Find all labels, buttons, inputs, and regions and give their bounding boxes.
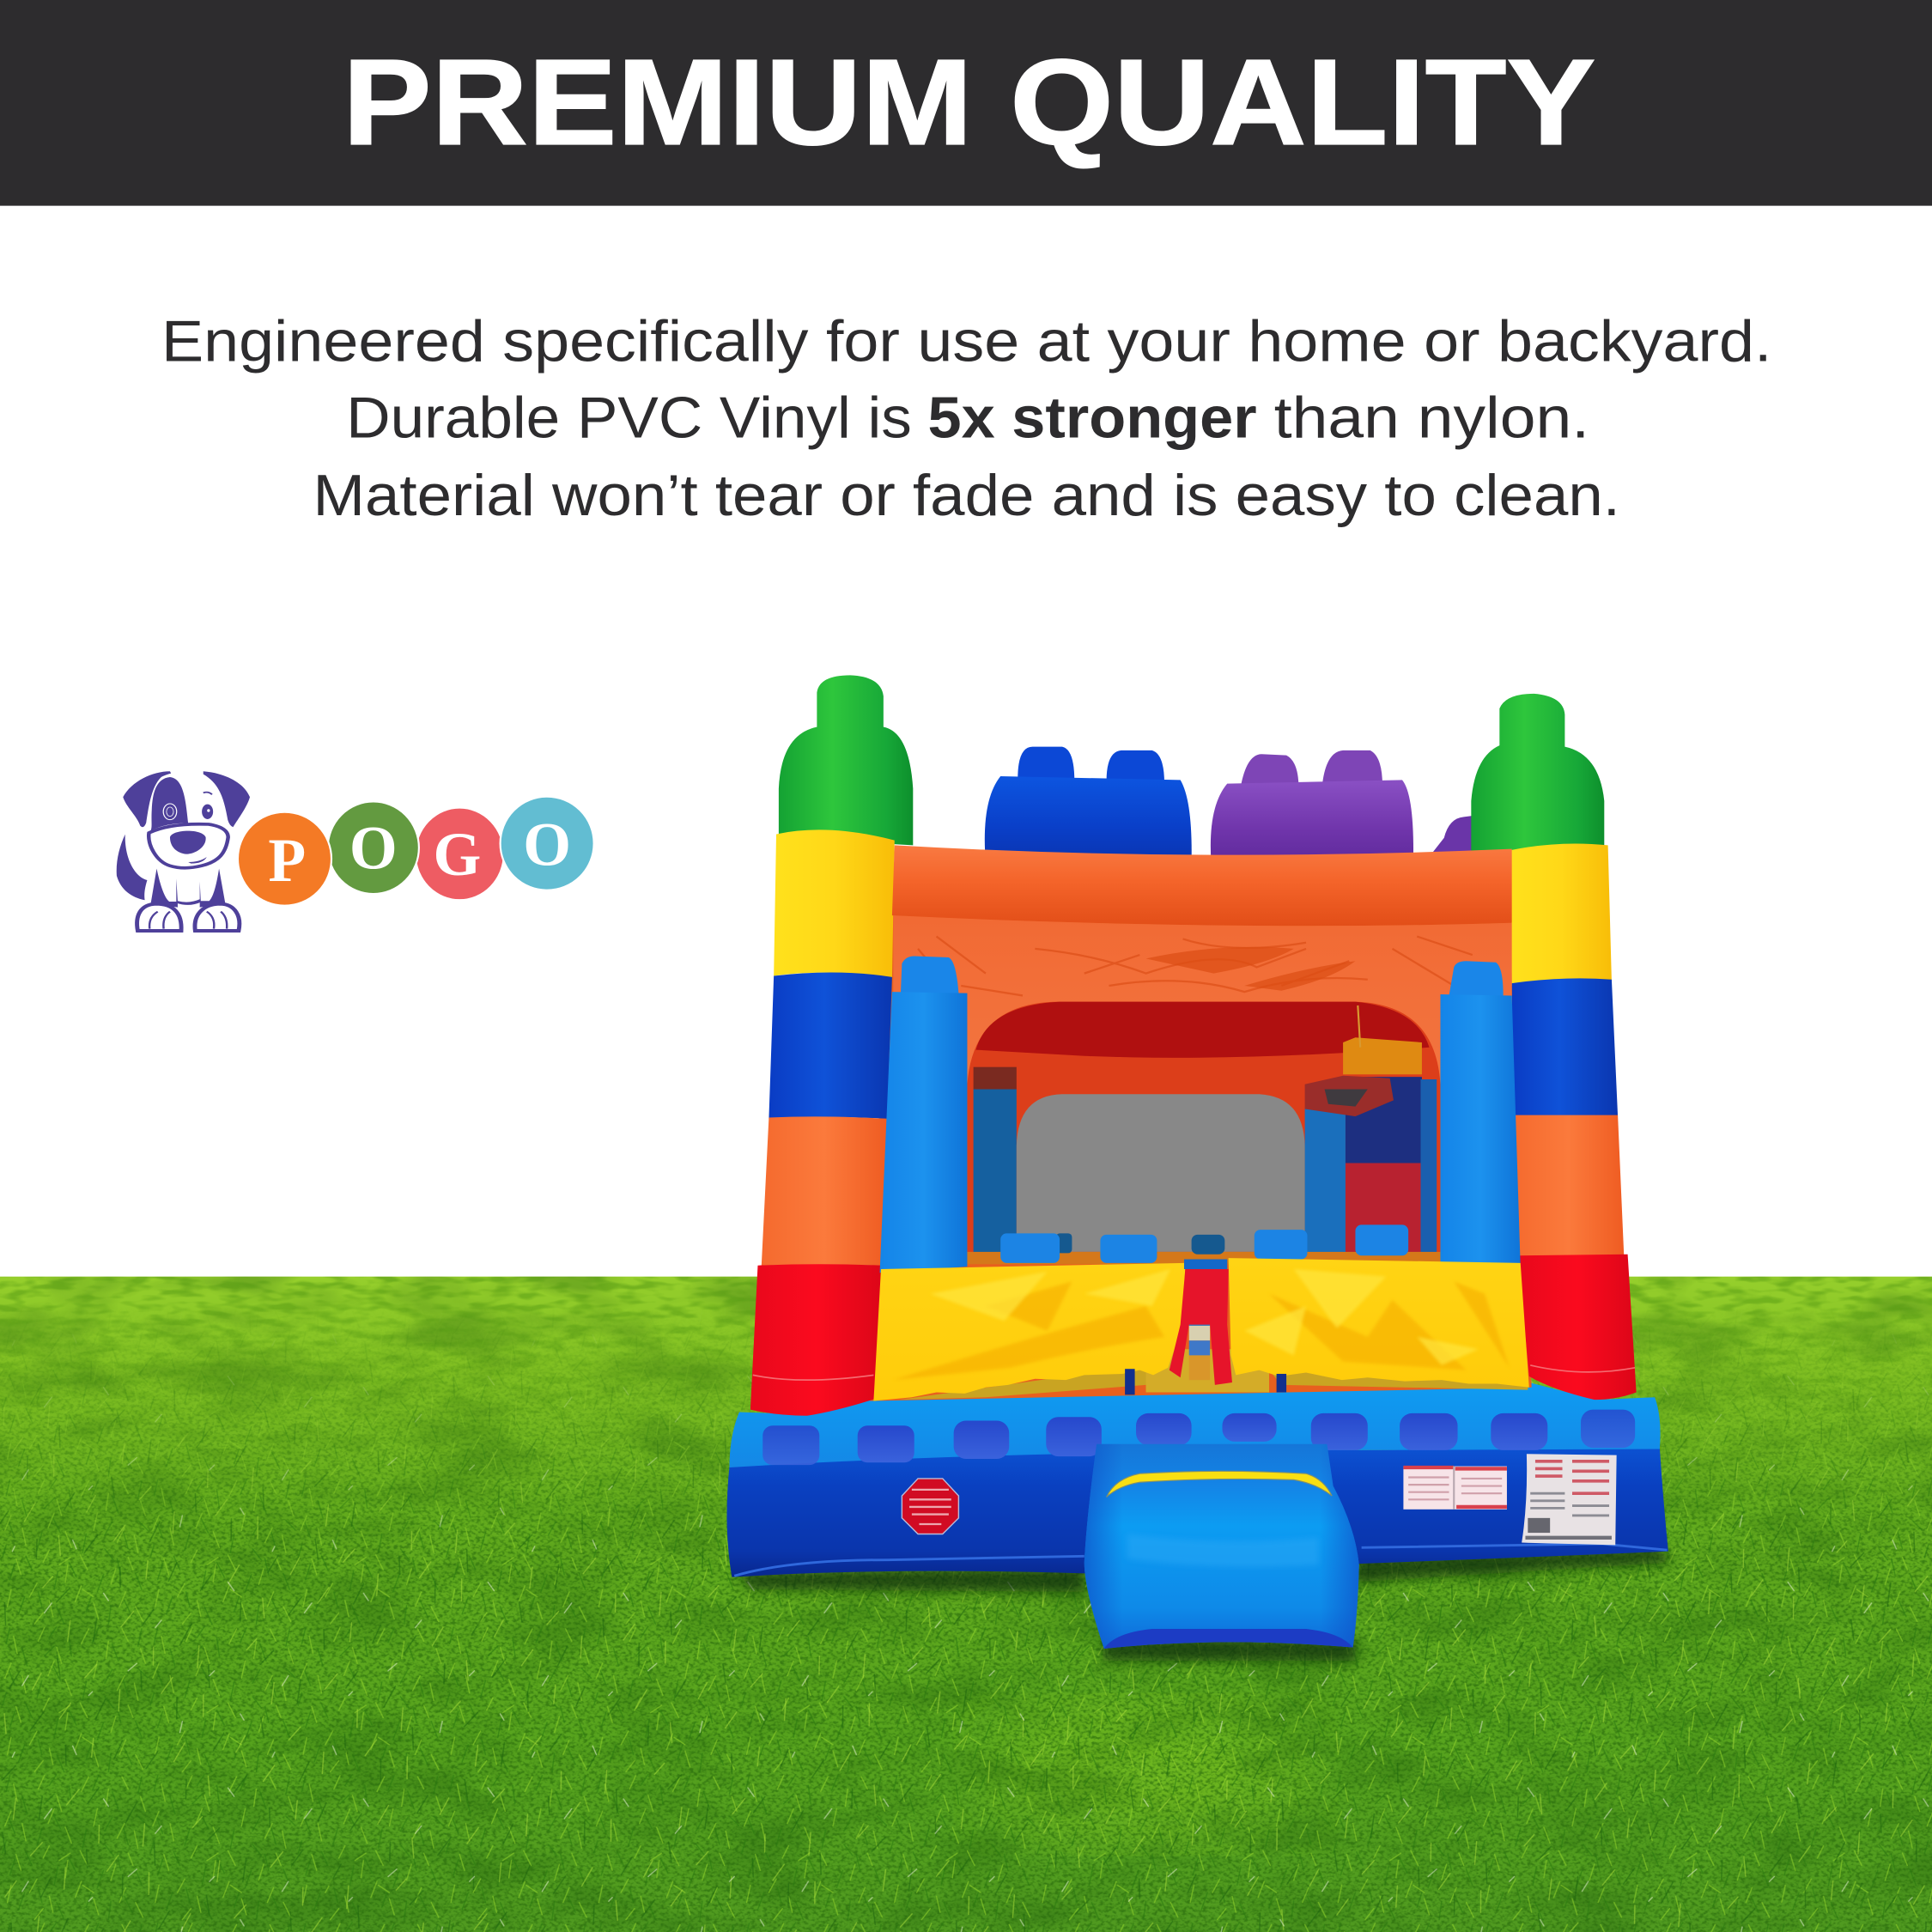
right tower stack <box>1510 843 1637 1400</box>
letter bubbles <box>238 797 594 906</box>
logo: Pogo <box>117 771 594 931</box>
blue strap tab <box>1184 1260 1227 1269</box>
instruction label <box>1522 1454 1617 1545</box>
title: PREMIUM QUALITY <box>343 34 1595 171</box>
orange wrinkled roof panel <box>893 915 1512 1257</box>
left blue section <box>769 973 892 1119</box>
base lower seam <box>734 1544 1667 1576</box>
icon: puppy mascot <box>117 771 250 931</box>
entrance gap <box>1146 1306 1269 1392</box>
left green tower cap <box>779 675 913 845</box>
flap folds <box>893 1281 1510 1380</box>
yellow front flaps <box>873 1258 1529 1401</box>
grass field <box>0 1277 1932 1932</box>
flap underside <box>900 1365 1528 1400</box>
left red section <box>750 1264 882 1416</box>
ground shadow <box>734 1547 1676 1661</box>
left inner post <box>974 1089 1017 1257</box>
floor ledge <box>967 1252 1440 1264</box>
left red seam <box>753 1375 873 1380</box>
header bar <box>0 0 1932 206</box>
right red seam <box>1530 1365 1635 1372</box>
left flap <box>873 1263 1185 1401</box>
tie straps <box>1125 1369 1286 1394</box>
castle backing wall <box>870 862 1532 1401</box>
right green tower cap <box>1471 694 1604 853</box>
ramp highlight <box>1127 1534 1318 1567</box>
front ramp <box>1084 1444 1359 1649</box>
ramp cushion <box>1084 1444 1359 1649</box>
left yellow section <box>774 829 895 978</box>
line 2: 5x stronger <box>928 386 1257 450</box>
blue roof block <box>985 747 1192 862</box>
arch back wall <box>967 1002 1440 1257</box>
line 2: than nylon. <box>1274 386 1589 450</box>
description text <box>161 309 1771 528</box>
dark canopy <box>975 1002 1430 1058</box>
line 2 <box>346 386 1589 450</box>
wordmark letters <box>268 810 571 895</box>
wordmark letters: G <box>433 820 481 889</box>
left orange section <box>762 1116 887 1266</box>
left blue pillar <box>880 957 967 1273</box>
roof wrinkles <box>918 937 1473 995</box>
base body <box>727 1448 1668 1577</box>
ramp base crescent <box>1104 1629 1353 1649</box>
right blue pillar <box>1440 961 1521 1267</box>
line 2: Durable PVC Vinyl is <box>346 386 912 450</box>
red entry strap <box>1170 1269 1232 1385</box>
right orange section <box>1513 1115 1624 1257</box>
warning labels <box>1403 1467 1507 1510</box>
arch opening <box>967 1002 1440 1264</box>
right blue section <box>1512 978 1618 1116</box>
orange roof roll <box>892 845 1512 926</box>
right yellow section <box>1510 843 1612 986</box>
ramp yellow stripe <box>1107 1471 1332 1497</box>
grey back opening <box>1017 1094 1305 1252</box>
left tower stack <box>750 829 895 1416</box>
wordmark letters: O <box>523 810 571 878</box>
line 1: Engineered specifically for use at your home or backyard. <box>161 309 1771 374</box>
bounce house <box>727 675 1676 1661</box>
line 3: Material won’t tear or fade and is easy to clean. <box>313 464 1620 528</box>
wordmark letters: O <box>349 814 398 883</box>
right inner wall <box>1305 1005 1437 1255</box>
icon: red octagon safety sign <box>902 1479 958 1534</box>
rear purple block <box>1431 816 1473 855</box>
ramp edge shading <box>1084 1444 1359 1649</box>
band windows <box>762 1410 1635 1465</box>
purple roof block <box>1211 750 1413 862</box>
base top band <box>729 1382 1661 1467</box>
front step bumps <box>1000 1224 1408 1263</box>
right red section <box>1518 1255 1637 1400</box>
wordmark letters: P <box>268 826 306 895</box>
right flap <box>1229 1258 1529 1388</box>
